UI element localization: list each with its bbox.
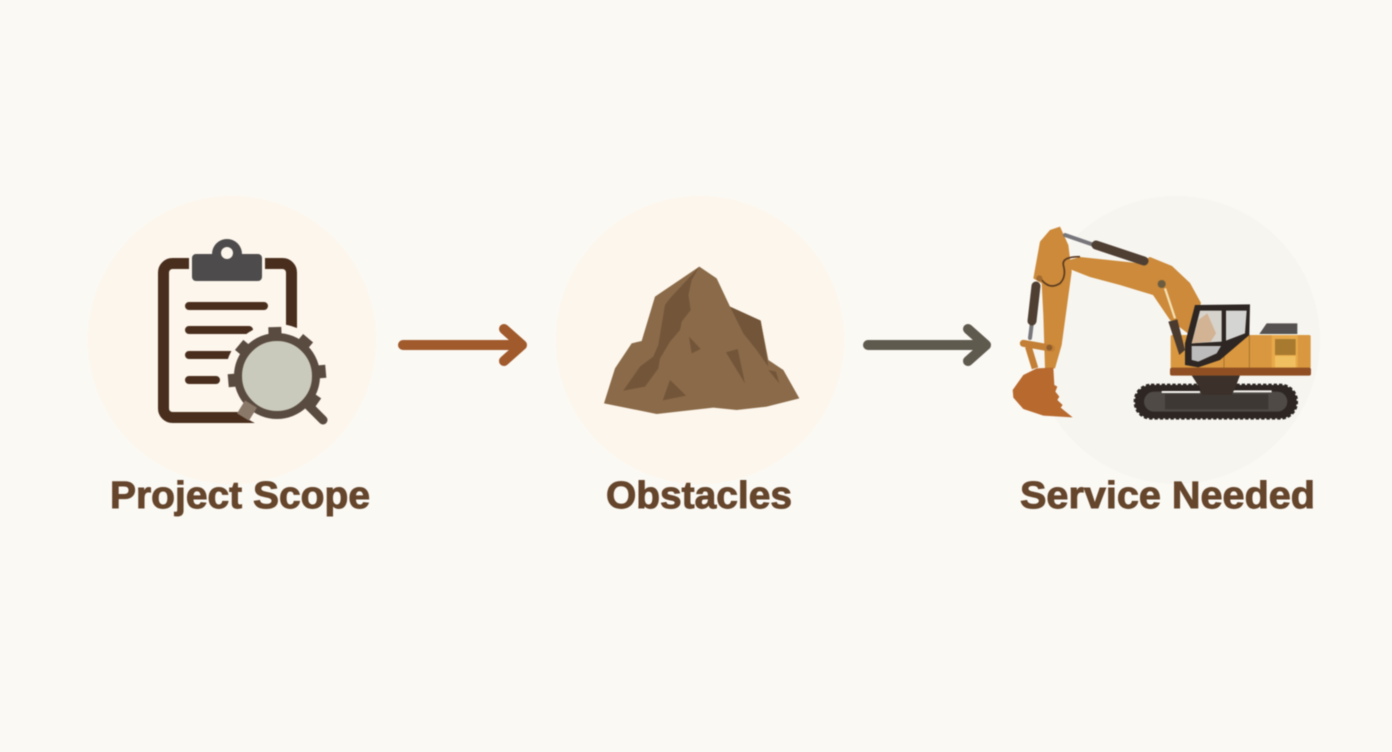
arrow: scope to obstacles xyxy=(403,329,522,361)
base bar xyxy=(1170,368,1311,376)
hydraulic cylinders xyxy=(1030,235,1144,338)
arrow: obstacles to service xyxy=(868,329,986,361)
bucket xyxy=(1013,368,1073,417)
icon: dirt pile xyxy=(604,267,799,414)
boom lift cylinder xyxy=(1165,288,1175,318)
background circle: project scope xyxy=(88,196,376,484)
engine body xyxy=(1171,335,1311,368)
step 3: service needed xyxy=(1013,196,1320,517)
background circle: obstacles xyxy=(556,196,844,484)
icon: clipboard xyxy=(164,239,292,418)
label: service needed: Service Needed xyxy=(1020,475,1315,517)
excavator arm xyxy=(1013,227,1080,417)
step 1: project scope xyxy=(88,196,376,517)
excavator boom xyxy=(1062,257,1201,335)
pedestal xyxy=(1192,375,1240,395)
label: project scope: Project Scope xyxy=(110,475,370,517)
step 2: obstacles xyxy=(556,196,844,517)
label: obstacles: Obstacles xyxy=(606,475,792,517)
undercarriage, body and cab xyxy=(1135,280,1311,418)
background circle: service needed xyxy=(1032,196,1320,484)
cab xyxy=(1185,304,1250,367)
tracks xyxy=(1135,385,1297,418)
icon: excavator xyxy=(1013,227,1311,418)
icon: magnifying gear xyxy=(225,324,329,428)
